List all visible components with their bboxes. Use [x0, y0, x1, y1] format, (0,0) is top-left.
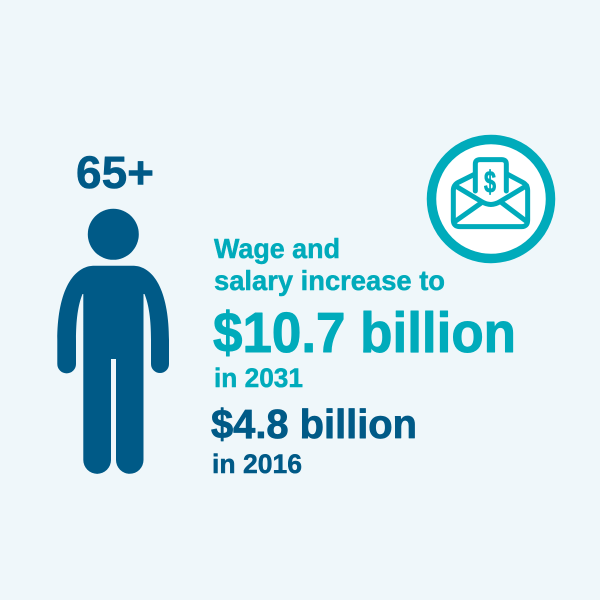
text: salary increase to: salary increase to — [214, 265, 445, 296]
text: in 2031: in 2031 — [214, 363, 303, 393]
stat: $10.7 billion: $10.7 billion — [213, 301, 516, 365]
heading: 65+: 65+ — [76, 147, 154, 198]
text: wage and: Wage and — [214, 233, 340, 264]
icon: envelope with dollar in a circle: $ — [484, 164, 496, 199]
stat: $4.8 billion: $4.8 billion — [211, 401, 417, 447]
icon: envelope with dollar in a circle — [432, 140, 550, 258]
icon: person — [57, 209, 169, 474]
text: in 2016: in 2016 — [212, 449, 302, 479]
